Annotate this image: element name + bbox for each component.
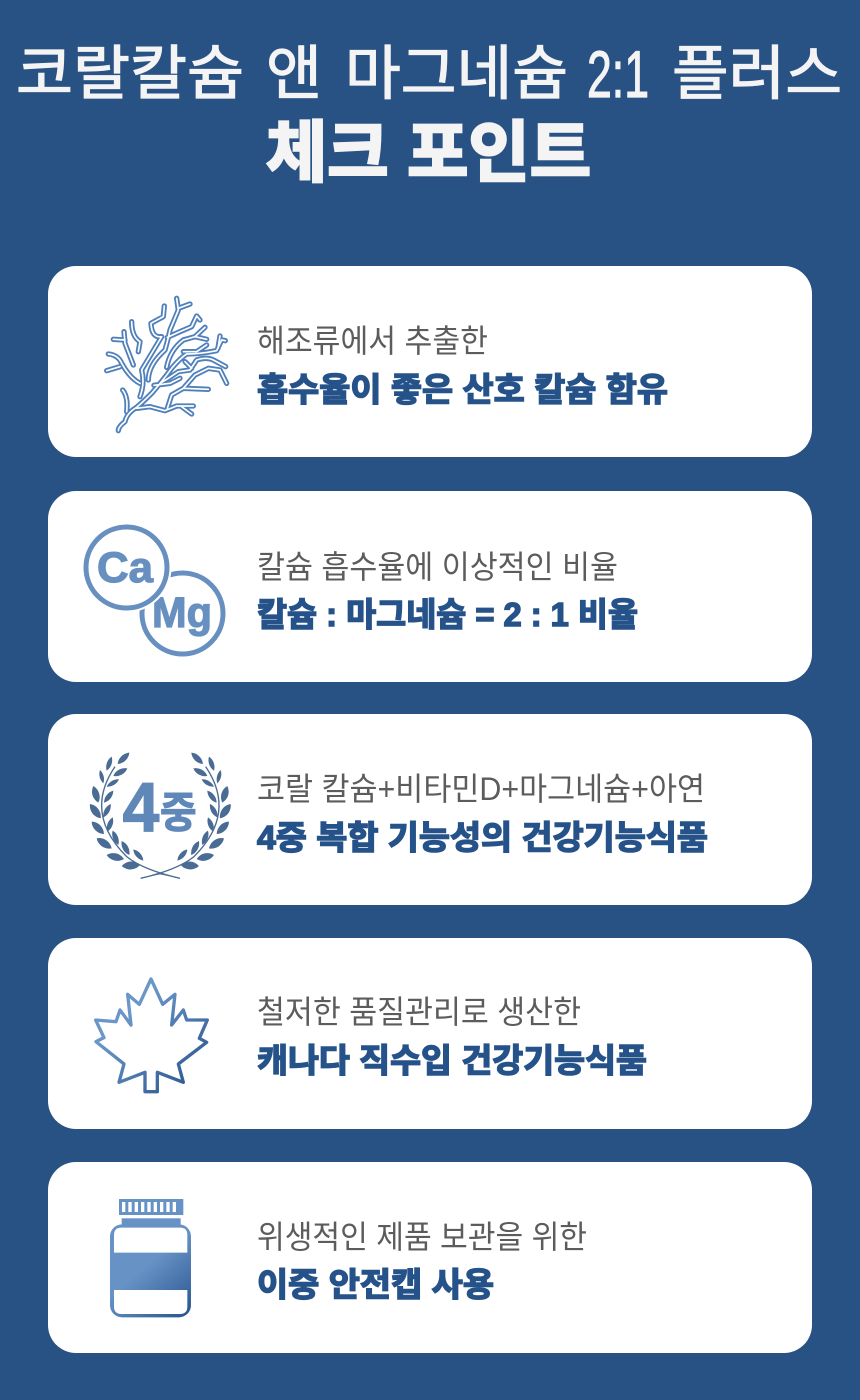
icon: Ca and Mg: Mg [152,589,212,637]
icon: Ca and Mg: Ca [97,544,154,592]
title: 2:1 [587,37,649,111]
icon: coral [107,298,227,431]
panel: safety cap [48,1162,812,1353]
text: ratio: 칼슘 흡수율에 이상적인 비율 [257,549,618,585]
panel: ratio [48,491,812,682]
panel: made in Canada [48,938,812,1129]
text: four functions [257,771,708,856]
title: 앤 [266,41,322,107]
icon: bottle [110,1199,191,1317]
icon: maple leaf [96,979,207,1092]
title: 마그네슘 [345,41,568,107]
panel: four functions [48,714,812,905]
text: four functions: 코랄 칼슘+비타민D+마그네슘+아연 [257,771,705,807]
text: safety cap: 이중 안전캡 사용 [257,1266,494,1303]
text: made in Canada: 철저한 품질관리로 생산한 [257,994,581,1030]
title: 코랄칼슘 [16,41,244,107]
text: ratio [257,549,638,633]
text: made in Canada: 캐나다 직수입 건강기능식품 [257,1042,647,1079]
text: coral calcium: 흡수율이 좋은 산호 칼슘 함유 [257,371,668,408]
icon: laurel 4중: 중 [160,789,197,837]
icon: laurel 4중: 4 [123,768,159,846]
panel: coral calcium [48,266,812,457]
icon: laurel 4중 [90,753,231,878]
text: made in Canada [257,994,647,1079]
title [16,37,842,191]
text: coral calcium [257,323,668,408]
text: four functions: 4중 복합 기능성의 건강기능식품 [257,819,708,856]
icon: Ca and Mg [86,527,223,654]
title: 플러스 [672,41,842,107]
text: ratio: 칼슘 : 마그네슘 = 2 : 1 비율 [257,596,638,633]
text: coral calcium: 해조류에서 추출한 [257,323,488,359]
text: safety cap [257,1219,587,1303]
text: safety cap: 위생적인 제품 보관을 위한 [257,1219,587,1255]
title: 체크 포인트 [266,116,591,191]
